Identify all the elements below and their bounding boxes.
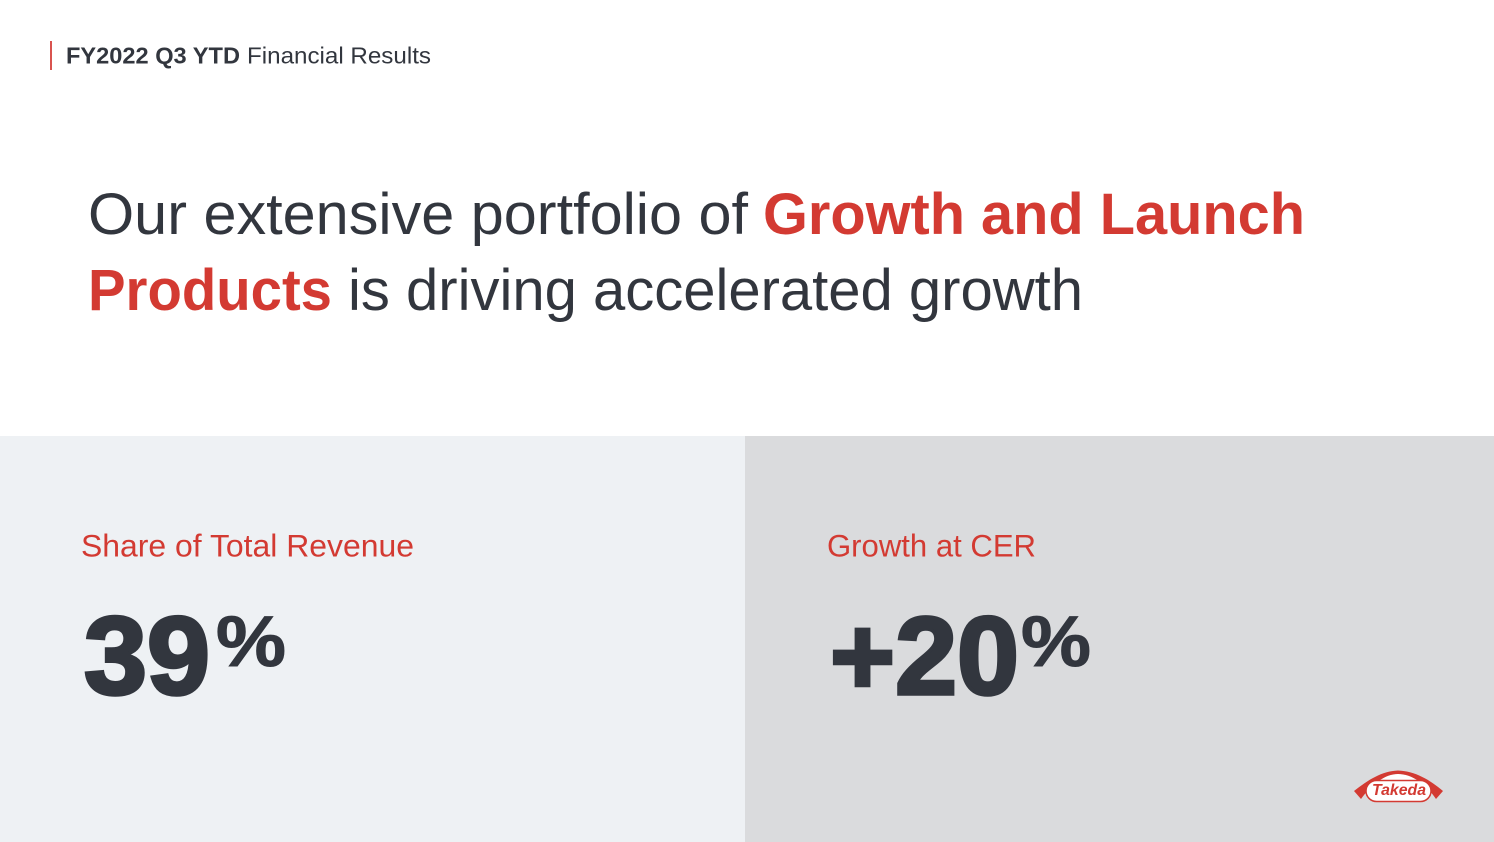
title: Products xyxy=(88,258,332,323)
icon: Takeda logo xyxy=(1354,770,1443,802)
label: growth at CER: Growth at CER xyxy=(827,528,1036,564)
title: is driving accelerated growth xyxy=(348,258,1083,323)
title: Our extensive portfolio of xyxy=(88,182,749,247)
title: Growth and Launch xyxy=(763,182,1305,247)
header: section label: Financial Results xyxy=(247,42,431,68)
icon: Takeda logo: Takeda xyxy=(1372,782,1426,799)
stat: 39% xyxy=(84,595,286,718)
header: section label: FY2022 Q3 YTD xyxy=(66,42,240,68)
stat: 39%: % xyxy=(216,603,286,682)
stat: +20%: +20 xyxy=(830,595,1019,718)
label: share of total revenue: Share of Total Revenue xyxy=(81,528,414,564)
header: section label xyxy=(50,41,431,70)
stat: 39%: 39 xyxy=(84,595,210,718)
title xyxy=(88,182,1305,323)
panel: share of total revenue xyxy=(0,436,745,842)
stat: +20%: % xyxy=(1021,603,1091,682)
panel: growth at CER xyxy=(745,436,1494,842)
